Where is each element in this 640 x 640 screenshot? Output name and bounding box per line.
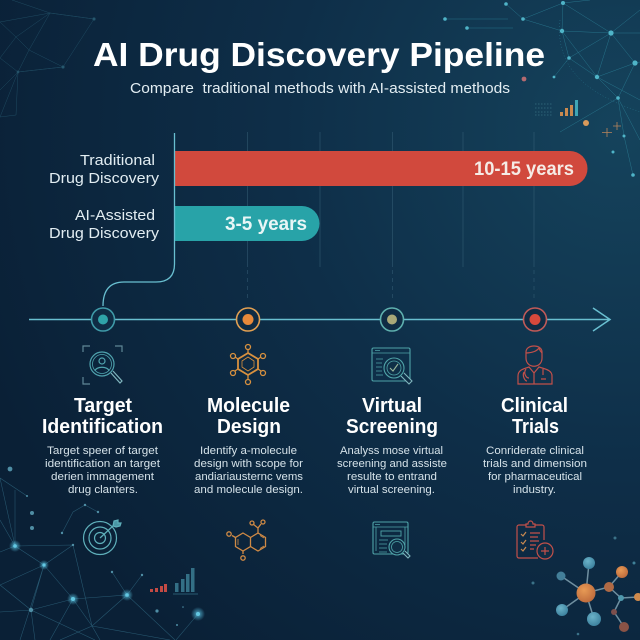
chart grid lines bbox=[248, 132, 534, 300]
heading: Clinical bbox=[501, 395, 568, 417]
bar: traditional bbox=[175, 151, 588, 186]
heading bbox=[501, 395, 568, 438]
icon: bullseye target bbox=[84, 520, 121, 554]
description: and molecule design. bbox=[194, 484, 303, 496]
heading bbox=[207, 395, 290, 438]
label: AI-assisted: Drug Discovery bbox=[49, 225, 160, 242]
heading: Identification bbox=[42, 416, 163, 438]
network: bottom left bbox=[0, 467, 205, 640]
step 1: target identification bbox=[42, 395, 163, 496]
label: traditional: Drug Discovery bbox=[49, 170, 160, 187]
heading: Virtual bbox=[362, 395, 422, 417]
icon: clipboard with plus bbox=[517, 521, 553, 559]
description: virtual screening. bbox=[348, 484, 435, 496]
icon: clinical trials bbox=[518, 346, 552, 384]
heading: Design bbox=[217, 416, 281, 438]
description bbox=[337, 445, 447, 496]
description bbox=[45, 445, 160, 496]
description: resulte to entrand bbox=[347, 471, 437, 483]
timeline nodes bbox=[92, 308, 546, 331]
bar: AI-assisted bbox=[175, 206, 320, 241]
network: top left bbox=[0, 0, 96, 117]
heading bbox=[42, 395, 163, 438]
node 4 bbox=[524, 308, 546, 331]
icon: virtual screening bbox=[372, 348, 412, 384]
description: identification an target bbox=[45, 458, 160, 470]
description: Target speer of target bbox=[47, 445, 158, 457]
description: Conriderate clinical bbox=[486, 445, 584, 457]
description bbox=[483, 445, 587, 496]
node 1 bbox=[92, 308, 114, 331]
heading: Screening bbox=[346, 416, 438, 438]
description: Identify a-molecule bbox=[200, 445, 297, 457]
description bbox=[194, 445, 304, 496]
description: industry. bbox=[513, 484, 556, 496]
heading: Target bbox=[74, 395, 132, 417]
step 3: virtual screening bbox=[337, 395, 447, 496]
description: for pharmaceutical bbox=[488, 471, 582, 483]
bar: traditional: 10-15 years bbox=[474, 159, 574, 180]
heading: Trials bbox=[512, 416, 559, 438]
description: drug clanters. bbox=[68, 484, 138, 496]
description: design with scope for bbox=[194, 458, 303, 470]
icon: fused ring molecule bbox=[227, 520, 266, 560]
label: AI-assisted: AI-Assisted bbox=[75, 207, 155, 224]
icon: screening window bbox=[373, 522, 410, 558]
timeline arrow bbox=[29, 308, 610, 331]
label: traditional bbox=[49, 152, 160, 187]
bar: AI-assisted: 3-5 years bbox=[225, 214, 307, 235]
duration bar chart bbox=[49, 151, 588, 242]
node 3 bbox=[380, 308, 404, 331]
description: Analyss mose virtual bbox=[340, 445, 443, 457]
icon: target identification bbox=[83, 346, 122, 384]
icon: molecule design bbox=[230, 344, 266, 384]
step 4: clinical trials bbox=[483, 395, 587, 496]
title: AI Drug Discovery Pipeline bbox=[93, 36, 545, 73]
label: traditional: Traditional bbox=[80, 152, 155, 169]
description: screening and assiste bbox=[337, 458, 447, 470]
node 2 bbox=[236, 308, 260, 331]
molecule decoration: bottom right bbox=[532, 536, 640, 635]
subtitle: Compare traditional methods with AI-assisted methods bbox=[130, 80, 510, 97]
heading: Molecule bbox=[207, 395, 290, 417]
step 2: molecule design bbox=[194, 395, 304, 496]
description: trials and dimension bbox=[483, 458, 587, 470]
network: top right bbox=[443, 0, 640, 177]
heading bbox=[346, 395, 438, 438]
connector line bbox=[103, 133, 174, 306]
description: andiariausternc vems bbox=[195, 471, 304, 483]
label: AI-assisted bbox=[49, 207, 160, 242]
description: derien immagement bbox=[51, 471, 154, 483]
